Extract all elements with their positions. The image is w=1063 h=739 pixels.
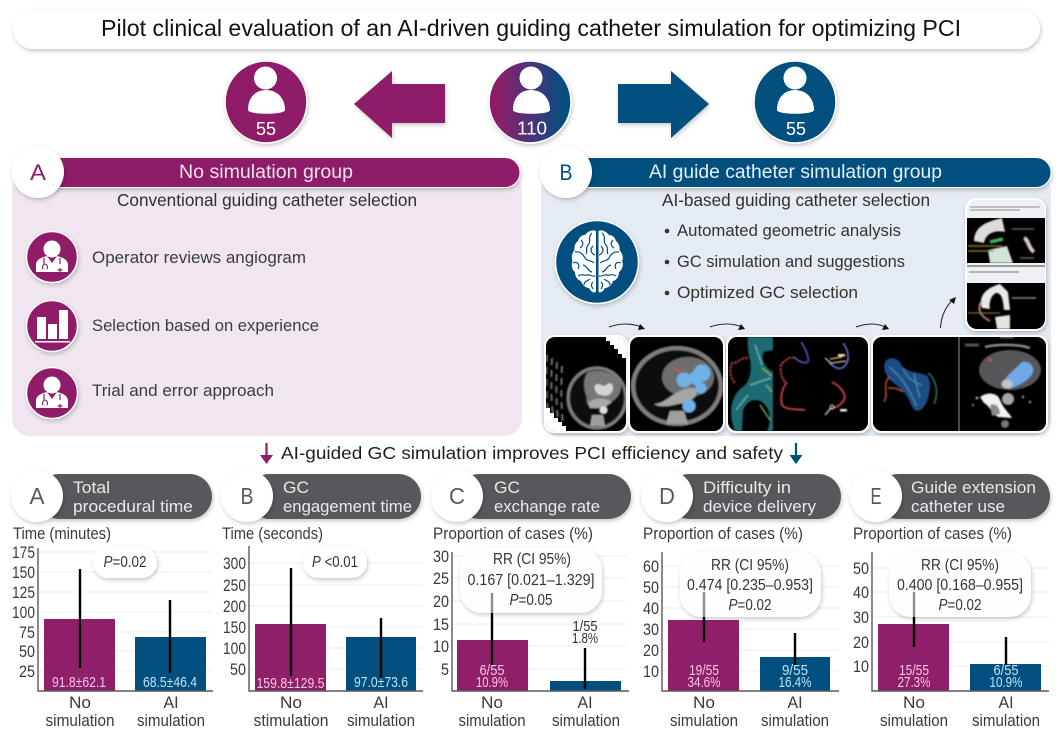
header: GC engagement time bbox=[221, 470, 421, 522]
text: selection based on experience: Selection based on experience bbox=[92, 317, 319, 335]
bar chart: difficulty in device delivery: No bbox=[693, 694, 715, 712]
panel: E guide extension catheter use bbox=[850, 470, 1050, 730]
bar chart: GC engagement time: 150 bbox=[223, 618, 246, 637]
arrow: model to simulation bbox=[856, 324, 889, 330]
heading: AI guide catheter simulation group: B bbox=[560, 160, 572, 185]
header: difficulty in device delivery: D bbox=[659, 483, 675, 509]
icon: all patients 110 bbox=[489, 61, 571, 143]
icon: all patients 110: 110 bbox=[517, 118, 547, 138]
header: guide extension catheter use: E bbox=[870, 483, 882, 509]
bar chart: total procedural time: 175 bbox=[12, 543, 35, 562]
bar chart: total procedural time: 68.5±46.4 bbox=[143, 674, 197, 691]
arrow: purple down bbox=[260, 443, 273, 464]
image: simulation result in heart bbox=[871, 335, 1048, 433]
bar chart: guide extension catheter use: 20 bbox=[853, 633, 869, 652]
header: difficulty in device delivery: device delivery bbox=[703, 497, 816, 516]
image: guiding catheter suggestions bbox=[965, 198, 1046, 331]
icon: operator doctor bbox=[26, 232, 78, 282]
callout: risk ratio: P=0.05 bbox=[510, 592, 553, 609]
list: AI selection steps: GC simulation and suggestions bbox=[677, 252, 905, 271]
panel: C GC exchange rate bbox=[431, 470, 631, 730]
axis title: Proportion of cases (%) bbox=[853, 525, 1012, 543]
callout: risk ratio: 0.400 [0.168–0.955] bbox=[897, 577, 1023, 594]
bar chart: GC exchange rate: 10 bbox=[433, 637, 449, 656]
bar chart: difficulty in device delivery: 10 bbox=[643, 662, 659, 681]
arrow: to AI simulation group bbox=[618, 71, 709, 138]
bar chart: guide extension catheter use: 10 bbox=[853, 657, 869, 676]
bar chart: difficulty in device delivery: 30 bbox=[643, 620, 659, 639]
header: total procedural time: Total bbox=[73, 478, 110, 497]
bar chart: guide extension catheter use: AI bbox=[998, 694, 1014, 712]
callout: P value: P=0.02 bbox=[104, 554, 147, 571]
heading: AI guide catheter simulation group: AI guide catheter simulation group bbox=[649, 162, 942, 183]
bar chart: GC engagement time bbox=[223, 546, 423, 730]
callout: risk ratio: RR (CI 95%) bbox=[921, 557, 999, 574]
icon: bar chart experience bbox=[26, 300, 78, 352]
bar chart: total procedural time bbox=[12, 543, 213, 730]
bar chart: GC engagement time: 250 bbox=[223, 576, 246, 595]
bar chart: guide extension catheter use: 50 bbox=[853, 559, 869, 578]
subheading: AI-based selection: AI-based guiding catheter selection bbox=[662, 190, 930, 210]
header: GC engagement time: engagement time bbox=[283, 497, 412, 516]
icon: brain bbox=[556, 220, 638, 304]
heading: no simulation group: No simulation group bbox=[179, 162, 353, 183]
bar chart: GC exchange rate bbox=[433, 547, 629, 730]
bar chart: total procedural time: simulation bbox=[137, 712, 205, 730]
bar chart: GC exchange rate: 10.9% bbox=[476, 674, 508, 691]
bar chart: GC exchange rate: 30 bbox=[433, 547, 449, 566]
bar chart: difficulty in device delivery: 16.4% bbox=[778, 674, 812, 691]
heading: main finding: AI-guided GC simulation improves PCI efficiency and safety bbox=[281, 443, 783, 463]
bar chart: difficulty in device delivery: simulation bbox=[761, 712, 829, 730]
list: AI selection steps bbox=[665, 221, 905, 302]
bar chart: total procedural time: AI bbox=[164, 694, 178, 712]
bar chart: difficulty in device delivery: 19/55 bbox=[689, 662, 719, 679]
bar chart: GC engagement time: AI bbox=[374, 694, 388, 712]
bar chart: GC exchange rate: 1/55 bbox=[572, 618, 598, 635]
callout: P value bbox=[93, 547, 157, 578]
icon: patients no simulation 55 bbox=[225, 61, 307, 143]
bar chart: difficulty in device delivery: 20 bbox=[643, 641, 659, 660]
bar chart: GC exchange rate: No bbox=[481, 694, 503, 712]
heading: no simulation group: A bbox=[30, 160, 46, 185]
arrow: scan to segmentation bbox=[609, 324, 645, 330]
callout: P value: P <0.01 bbox=[312, 554, 358, 571]
bar chart: difficulty in device delivery: 34.6% bbox=[688, 674, 720, 691]
icon: patients AI simulation 55: 55 bbox=[786, 118, 806, 139]
header: total procedural time bbox=[11, 470, 212, 522]
bar chart: GC exchange rate: 1.8% bbox=[572, 630, 598, 647]
callout: risk ratio: 0.474 [0.235–0.953] bbox=[687, 577, 813, 594]
bar chart: GC exchange rate: 6/55 bbox=[480, 662, 504, 679]
bar chart: total procedural time: 150 bbox=[12, 563, 35, 582]
image: CT scan stack bbox=[544, 335, 628, 433]
text: trial and error approach: Trial and error approach bbox=[92, 382, 274, 400]
header: GC engagement time: B bbox=[240, 483, 254, 509]
bar chart: GC engagement time: 200 bbox=[223, 597, 246, 616]
arrow: simulation to suggestions bbox=[940, 297, 956, 328]
bar chart: total procedural time: 75 bbox=[19, 623, 35, 642]
bar chart: guide extension catheter use: No bbox=[903, 694, 925, 712]
callout: risk ratio bbox=[889, 552, 1031, 617]
bar chart: difficulty in device delivery: simulation bbox=[670, 712, 738, 730]
bar chart: total procedural time: 125 bbox=[12, 583, 35, 602]
header: GC exchange rate bbox=[431, 470, 631, 522]
bar chart: difficulty in device delivery: 40 bbox=[643, 599, 659, 618]
header: GC exchange rate: C bbox=[449, 483, 465, 509]
callout: risk ratio: RR (CI 95%) bbox=[711, 557, 789, 574]
bar chart: GC engagement time: 159.8±129.5 bbox=[256, 675, 324, 692]
header: total procedural time: A bbox=[30, 483, 45, 509]
heading: no simulation group bbox=[12, 146, 520, 198]
bar chart: difficulty in device delivery: 60 bbox=[643, 557, 659, 576]
arrow: segmentation to model bbox=[710, 324, 745, 330]
list: AI selection steps: Automated geometric analysis bbox=[677, 221, 901, 240]
title bbox=[13, 9, 1040, 49]
callout: risk ratio: 0.167 [0.021–1.329] bbox=[468, 572, 594, 589]
bar chart: guide extension catheter use bbox=[853, 552, 1049, 730]
bar chart: total procedural time: 100 bbox=[12, 603, 35, 622]
header: difficulty in device delivery bbox=[641, 470, 841, 522]
arrow: blue down bbox=[790, 443, 802, 464]
subheading: conventional selection: Conventional guiding catheter selection bbox=[117, 190, 417, 210]
panel: AI guide catheter simulation group bbox=[540, 146, 1051, 436]
bar chart: total procedural time: 25 bbox=[19, 662, 35, 681]
bar chart: GC exchange rate: simulation bbox=[552, 712, 620, 730]
bar chart: difficulty in device delivery: 50 bbox=[643, 578, 659, 597]
header: GC engagement time: GC bbox=[283, 478, 309, 497]
header: total procedural time: procedural time bbox=[73, 497, 193, 516]
bar chart: guide extension catheter use: 10.9% bbox=[990, 674, 1022, 691]
title: Pilot clinical evaluation of an AI-driven guiding catheter simulation for optimizing PCI bbox=[101, 15, 961, 41]
panel: A total procedural time bbox=[11, 470, 213, 730]
bar chart: guide extension catheter use: 40 bbox=[853, 583, 869, 602]
callout: risk ratio: RR (CI 95%) bbox=[493, 551, 571, 568]
axis title: Time (seconds) bbox=[222, 525, 323, 543]
bar chart: total procedural time: 50 bbox=[19, 642, 35, 661]
panel: no simulation group bbox=[12, 146, 522, 436]
bar chart: GC exchange rate: AI bbox=[578, 694, 592, 712]
bar chart: total procedural time: simulation bbox=[46, 712, 114, 730]
bar chart: guide extension catheter use: 30 bbox=[853, 608, 869, 627]
callout: risk ratio bbox=[680, 552, 821, 617]
heading: AI guide catheter simulation group bbox=[540, 146, 1051, 198]
axis title: Proportion of cases (%) bbox=[643, 525, 803, 543]
bar chart: guide extension catheter use: simulation bbox=[972, 712, 1040, 730]
header: difficulty in device delivery: Difficulty in bbox=[703, 478, 791, 497]
image: aorta model with catheter wires bbox=[726, 335, 870, 433]
icon: trial doctor bbox=[26, 368, 78, 418]
panel: B GC engagement time bbox=[221, 470, 423, 730]
panel: D difficulty in device delivery bbox=[641, 470, 841, 730]
bar chart: guide extension catheter use: 15/55 bbox=[899, 662, 929, 679]
bar chart: guide extension catheter use: 6/55 bbox=[994, 662, 1018, 679]
bar chart: difficulty in device delivery: 9/55 bbox=[782, 662, 808, 679]
callout: P value bbox=[303, 547, 367, 578]
bar chart: GC engagement time: stimulation bbox=[254, 712, 328, 730]
bar chart: difficulty in device delivery: AI bbox=[788, 694, 802, 712]
bar chart: GC engagement time: simulation bbox=[347, 712, 415, 730]
list: AI selection steps: Optimized GC selection bbox=[677, 283, 858, 302]
bar chart: GC engagement time: 50 bbox=[230, 660, 246, 679]
image: CT with segmented chambers bbox=[628, 335, 725, 433]
bar chart: guide extension catheter use: 27.3% bbox=[898, 674, 930, 691]
icon: patients no simulation 55: 55 bbox=[256, 118, 276, 139]
bar chart: total procedural time: No bbox=[69, 694, 91, 712]
bar chart: GC exchange rate: simulation bbox=[458, 712, 526, 730]
bar chart: GC engagement time: 300 bbox=[223, 554, 246, 573]
bar chart: GC engagement time: No bbox=[280, 694, 302, 712]
bar chart: GC exchange rate: 25 bbox=[433, 569, 449, 588]
callout: risk ratio bbox=[460, 548, 602, 613]
axis title: Proportion of cases (%) bbox=[433, 525, 593, 543]
header: guide extension catheter use: Guide extension bbox=[911, 478, 1036, 497]
bar chart: guide extension catheter use: simulation bbox=[880, 712, 948, 730]
axis title: Time (minutes) bbox=[13, 525, 111, 543]
header: guide extension catheter use bbox=[850, 470, 1050, 522]
callout: risk ratio: P=0.02 bbox=[938, 597, 982, 614]
bar chart: GC exchange rate: 20 bbox=[433, 592, 449, 611]
header: GC exchange rate: GC bbox=[494, 478, 520, 497]
bar chart: difficulty in device delivery bbox=[643, 552, 839, 730]
header: GC exchange rate: exchange rate bbox=[494, 497, 600, 516]
bar chart: GC engagement time: 100 bbox=[223, 639, 246, 658]
bar chart: GC engagement time: 97.0±73.6 bbox=[354, 674, 408, 691]
text: operator reviews angiogram: Operator reviews angiogram bbox=[92, 249, 306, 267]
arrow: to no simulation group bbox=[354, 71, 445, 138]
callout: risk ratio: P=0.02 bbox=[728, 597, 772, 614]
bar chart: GC exchange rate: 5 bbox=[441, 660, 449, 679]
icon: patients AI simulation 55 bbox=[754, 61, 836, 143]
bar chart: GC exchange rate: 15 bbox=[433, 615, 449, 634]
bar chart: total procedural time: 91.8±62.1 bbox=[52, 674, 106, 691]
header: guide extension catheter use: catheter use bbox=[911, 497, 1005, 516]
